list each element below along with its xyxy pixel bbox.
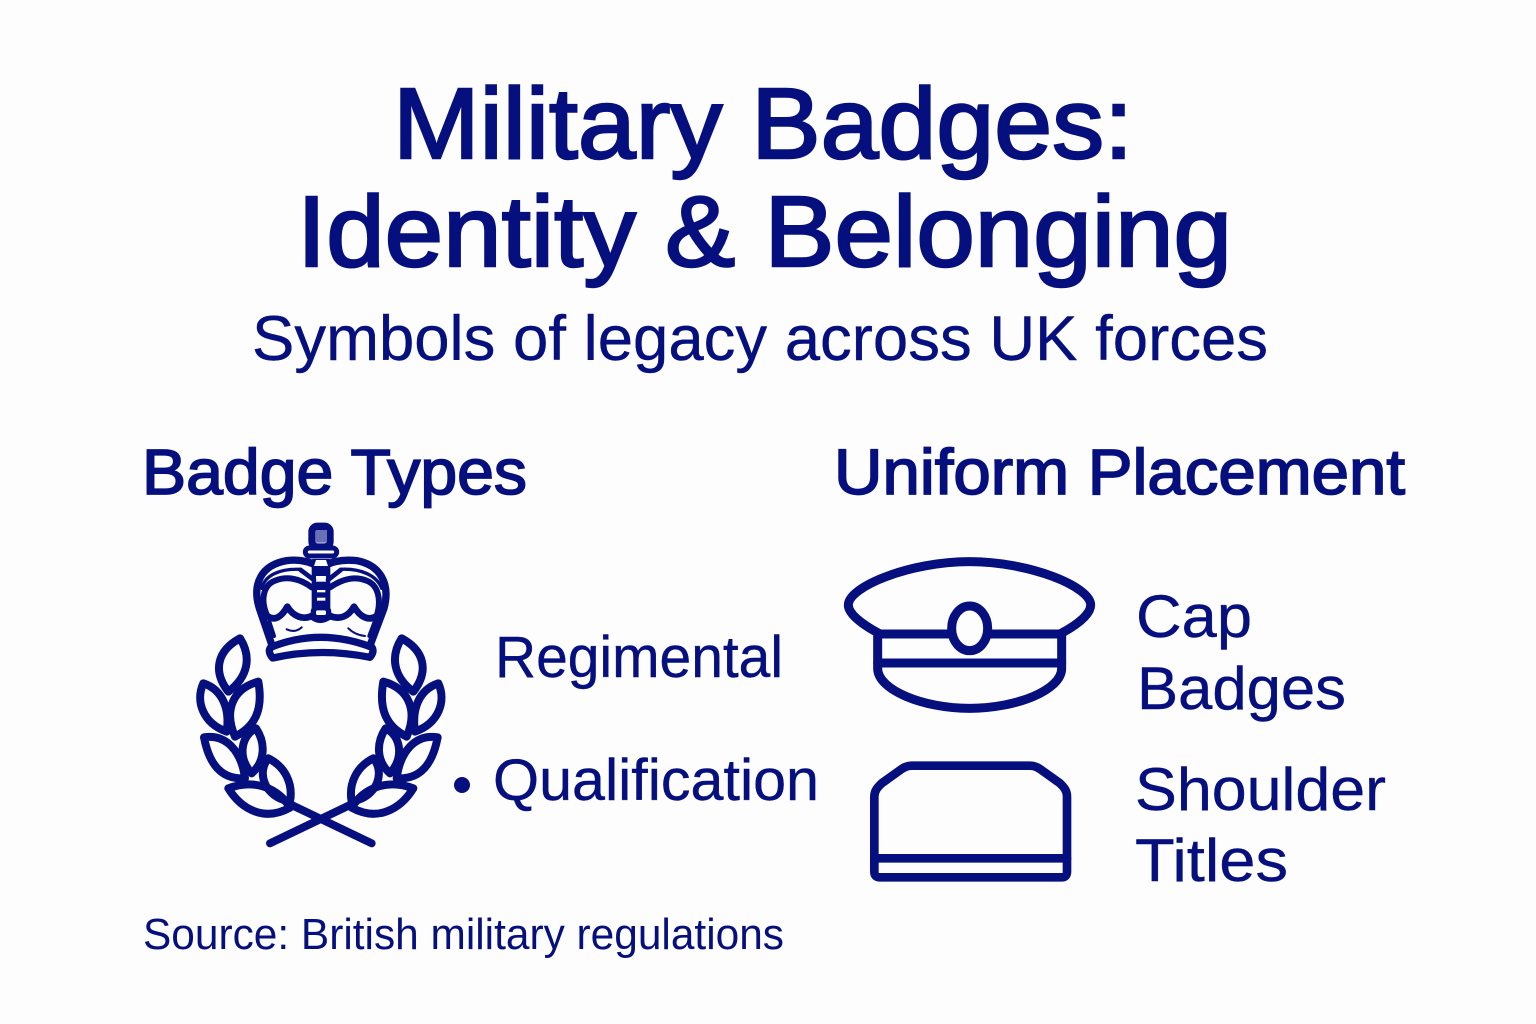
bullet — [454, 777, 470, 793]
title — [297, 68, 1232, 288]
icon: shoulder title — [874, 766, 1067, 877]
title: Military Badges: — [393, 68, 1133, 180]
heading: uniform placement: Uniform Placement — [834, 436, 1405, 508]
label: cap badges: Cap — [1136, 583, 1252, 650]
panel: uniform placement — [834, 436, 1405, 894]
label: cap badges — [1136, 583, 1346, 722]
laurel right — [270, 638, 441, 843]
laurel left — [200, 638, 372, 843]
icon: peaked cap — [848, 562, 1091, 708]
label: shoulder titles — [1135, 756, 1386, 894]
subtitle: Symbols of legacy across UK forces — [252, 304, 1268, 374]
icon: crown and laurel badge — [200, 526, 441, 843]
label: regimental: Regimental — [495, 625, 783, 690]
label: shoulder titles: Shoulder — [1135, 756, 1386, 823]
label: qualification: Qualification — [493, 748, 819, 813]
source note: Source: British military regulations — [143, 910, 784, 959]
label: cap badges: Badges — [1137, 655, 1346, 722]
title: Identity & Belonging — [297, 176, 1232, 288]
crown — [257, 526, 386, 658]
label: shoulder titles: Titles — [1135, 827, 1288, 894]
panel: badge types — [142, 436, 819, 843]
heading: badge types: Badge Types — [142, 436, 527, 508]
